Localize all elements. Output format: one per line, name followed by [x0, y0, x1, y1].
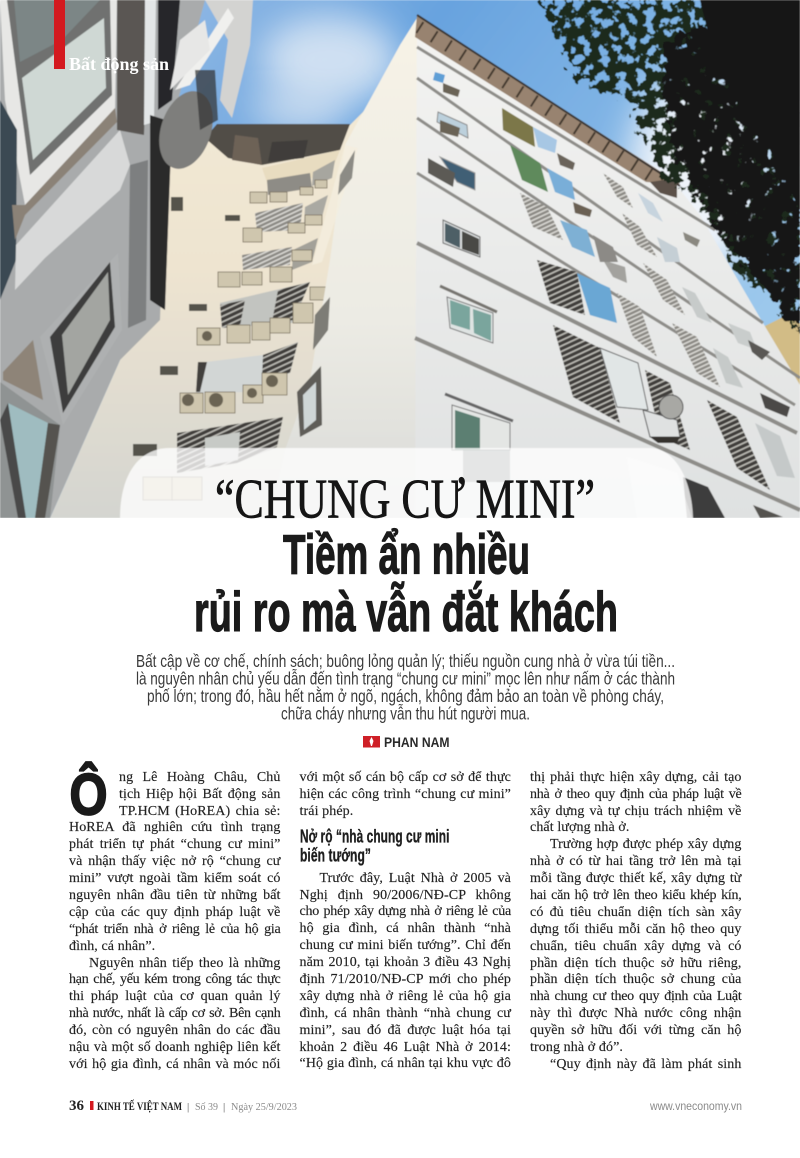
article column one: thi pháp luật của cơ quan quản lý	[69, 989, 280, 1004]
article column three: dựng tối thiểu mỗi căn hộ theo quy	[530, 922, 742, 937]
footer	[69, 1098, 742, 1114]
icon: red pen badge	[363, 736, 380, 748]
roof eaves	[415, 15, 680, 184]
article column one: nhà nước, nhất là cấp cơ sở. Bên cạnh	[69, 1006, 280, 1021]
article column two: Trước đây, Luật Nhà ở 2005 và	[320, 871, 511, 886]
fire escape and balcony	[158, 0, 180, 110]
intro paragraph: phố lớn; trong đó, hầu hết nằm ở ngõ, ngách, không đảm bảo an toàn về phòng cháy,	[147, 685, 664, 706]
article column one: “phát triển nhà ở riêng lẻ của hộ gia	[69, 922, 280, 937]
article column three: thị phải thực hiện xây dựng, cải tạo	[530, 770, 742, 785]
article column three: chất lượng nhà ở.	[530, 820, 630, 835]
article column three: này thì được Nhà nước công nhận	[530, 1006, 742, 1021]
article column three: Trường hợp được phép xây dựng	[550, 837, 742, 852]
headline line one: “CHUNG CƯ MINI”	[215, 470, 595, 530]
foreground building on the left	[0, 0, 253, 518]
article column two: xây dựng nhà ở riêng lẻ của hộ gia	[300, 989, 511, 1004]
article column one: với hộ gia đình, cá nhân và móc nối	[69, 1057, 280, 1072]
footer: |	[223, 1101, 225, 1113]
article column one: phát triển tự phát “chung cư mini”	[69, 837, 280, 852]
article column two: định 71/2010/NĐ-CP mới cho phép	[300, 972, 511, 987]
article column two	[299, 770, 512, 1071]
article column one: tịch Hiệp hội Bất động sản	[119, 787, 280, 802]
article column one: ng Lê Hoàng Châu, Chủ	[119, 770, 280, 785]
article column three: xây dựng và tự chịu trách nhiệm về	[530, 804, 742, 819]
air conditioner units	[143, 180, 328, 500]
window and unit inside panel	[463, 450, 692, 518]
article column three: trong nhà ở đó”.	[530, 1040, 623, 1055]
article column three: hai căn hộ trở lên theo kiểu khép kín,	[530, 888, 742, 903]
footer: Ngày 25/9/2023	[231, 1101, 297, 1113]
back building with curved facade	[50, 60, 415, 518]
article column one: đó, còn có nguyên nhân do các đầu	[69, 1023, 280, 1038]
article column three: chuẩn, tiêu chuẩn xây dựng và có	[530, 939, 742, 954]
article column three: có đủ tiêu chuẩn diện tích sàn xây	[530, 905, 742, 920]
red marker	[90, 1101, 94, 1110]
magazine name: KINH TẾ VIỆT NAM	[97, 1098, 182, 1113]
article column three: nhà ở theo quy định của pháp luật về	[530, 787, 742, 802]
byline	[363, 734, 450, 750]
article column two: với một số cán bộ cấp cơ sở để thực	[300, 770, 511, 785]
article column one: cập của các quy định pháp luật về	[69, 905, 280, 920]
article column two: cho phép xây dựng nhà ở riêng lẻ của	[300, 904, 511, 919]
article column one: đình, cá nhân”.	[69, 939, 155, 954]
footer: Số 39	[195, 1101, 218, 1113]
page number: 36	[69, 1098, 84, 1114]
article column two: chung cư mini biến tướng”. Chỉ đến	[300, 938, 511, 953]
article column two: mini”, sau đó đã được luật hóa tại	[300, 1023, 511, 1038]
red accent bar	[54, 0, 65, 69]
subheading	[300, 827, 449, 866]
article column one: HoREA đã nghiên cứu tình trạng	[69, 820, 280, 835]
article column two: hiện các công trình “chung cư mini”	[300, 787, 511, 802]
article column two: Nghị định 90/2006/NĐ-CP không	[300, 888, 511, 903]
photo: apartment building seen from below	[0, 0, 800, 518]
intro paragraph	[136, 651, 675, 724]
facade ledges	[415, 47, 800, 510]
article column three: “Quy định này đã làm phát sinh	[550, 1057, 742, 1072]
main building left side	[270, 18, 420, 518]
article column one	[68, 770, 281, 1072]
article column one: nguyên nhân đầu tiên từ những bất	[69, 888, 280, 903]
article column two: “Hộ gia đình, cá nhân tại khu vực đô	[300, 1056, 511, 1071]
article column three	[530, 770, 742, 1072]
section name: Bất động sản	[69, 54, 169, 74]
outdoor units and satellite dish	[428, 83, 790, 443]
article column two: năm 2010, tại khoản 3 điều 43 Nghị	[300, 955, 511, 970]
article column one: và nhận thấy việc nở rộ “chung cư	[69, 854, 280, 869]
article column one: mini” vượt ngoài tầm kiểm soát có	[69, 871, 280, 886]
windows	[433, 72, 795, 518]
article column two: trái phép.	[300, 804, 353, 819]
article column three: quyền sở hữu đối với từng căn hộ	[530, 1023, 742, 1038]
tree foliage	[540, 0, 800, 335]
section label	[54, 0, 169, 74]
website: www.vneconomy.vn	[649, 1099, 742, 1113]
article column one: nậu và một số doanh nghiệp liên kết	[69, 1040, 280, 1055]
article column three: phần diện tích thuộc sở chung của	[530, 972, 742, 987]
sky	[0, 0, 800, 518]
article column three: phần diện tích thuộc sở hữu riêng,	[530, 956, 742, 971]
intro paragraph: chữa cháy nhưng vẫn thu hút người mua.	[281, 702, 530, 724]
main building front facade	[415, 15, 800, 518]
yellow building far right	[763, 315, 800, 400]
article column three: nhà ở có từ hai tầng trở lên mà tại	[530, 854, 742, 869]
article column three: mỗi tầng được thiết kế, xây dựng từ	[530, 871, 742, 886]
wall vents	[133, 197, 240, 456]
window grilles	[267, 173, 312, 195]
article column three: nhà chung cư theo quy định của Luật	[530, 989, 742, 1004]
subheading: biến tướng”	[300, 846, 370, 866]
article column one: hạn chế, yếu kém trong công tác thực	[69, 972, 280, 987]
article column one: TP.HCM (HoREA) chia sẻ:	[119, 804, 280, 819]
headline	[194, 470, 618, 640]
translucent title panel	[120, 448, 693, 518]
headline line two: Tiềm ẩn nhiều	[283, 522, 530, 586]
article column two: khoản 2 điều 46 Luật Nhà ở 2014:	[300, 1040, 511, 1055]
article column two: hộ gia đình, cá nhân thành “nhà	[300, 921, 511, 936]
article column one: Nguyên nhân tiếp theo là những	[89, 956, 280, 971]
article column two: đình, cá nhân thành “nhà chung cư	[300, 1006, 511, 1021]
issue info: |	[187, 1101, 189, 1113]
